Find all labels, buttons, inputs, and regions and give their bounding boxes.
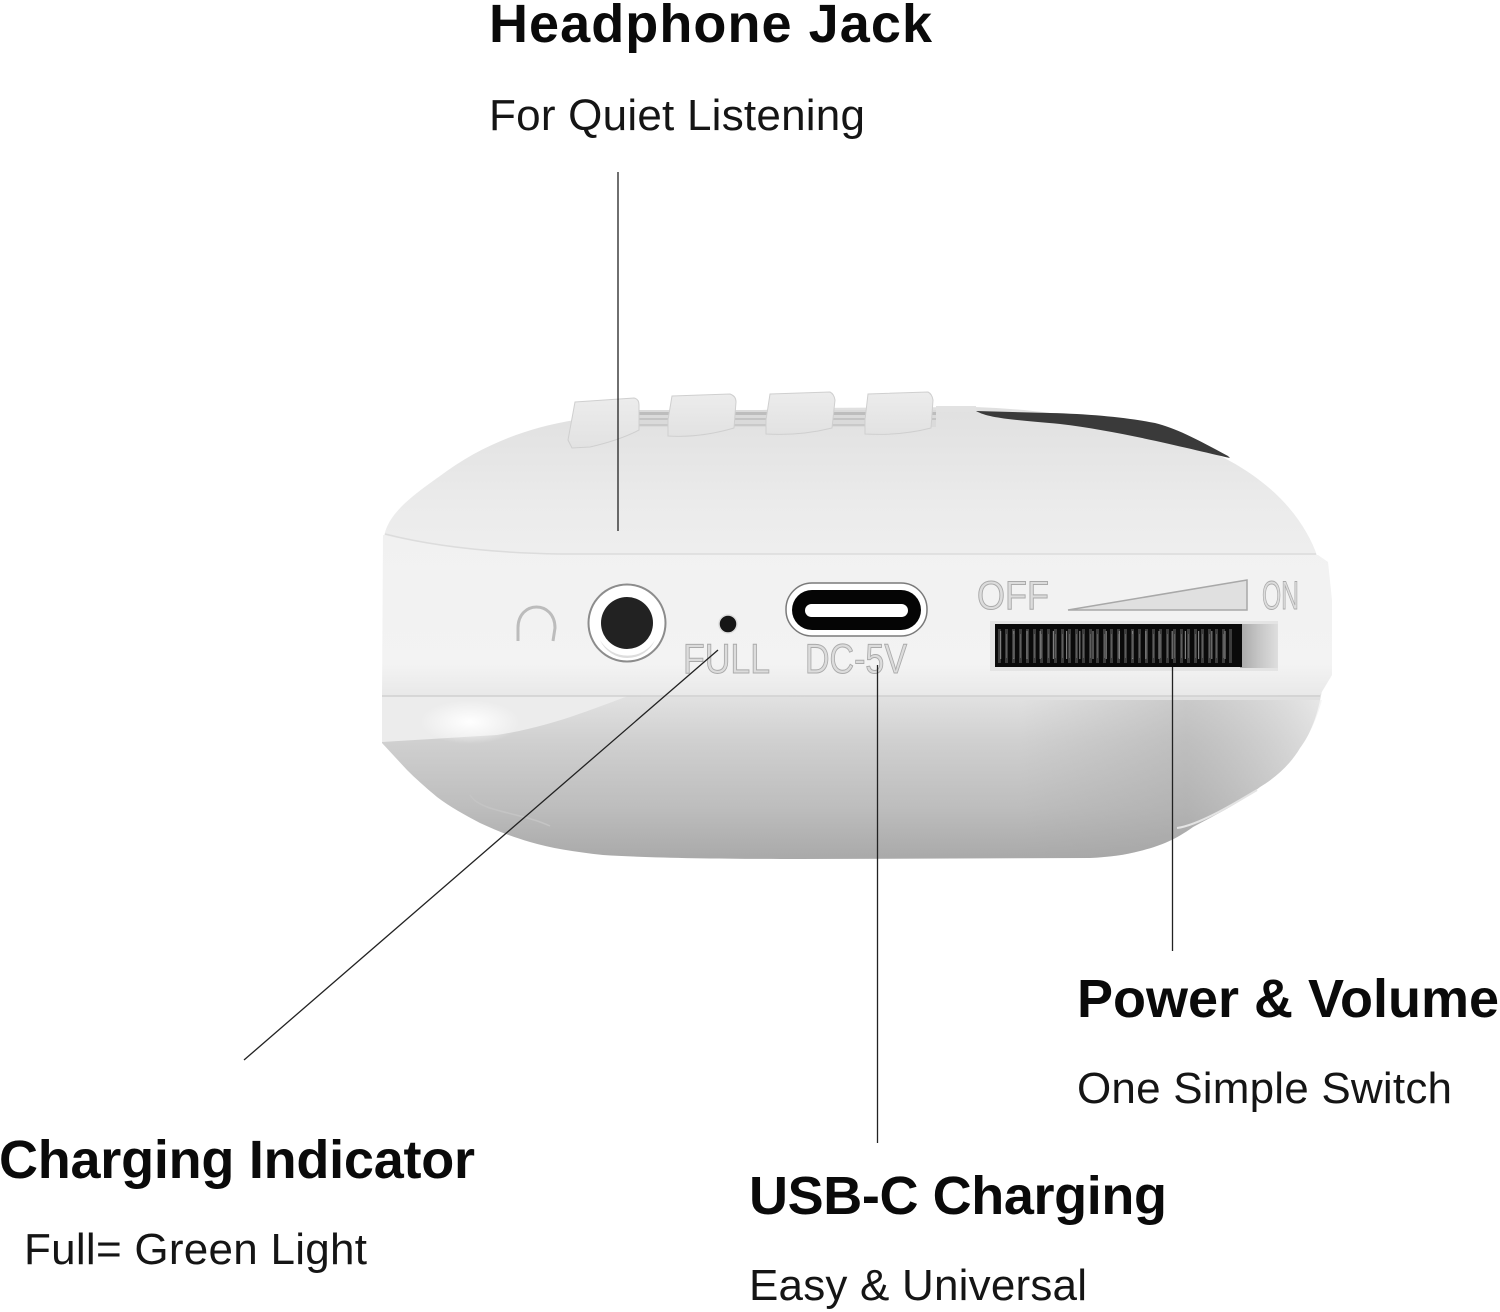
bevel highlight (420, 700, 520, 744)
DC-5V label: DC-5V (805, 635, 907, 682)
side button 2 (668, 394, 736, 436)
charging LED (719, 615, 737, 633)
device upper shell (383, 407, 1318, 600)
callout: power and volume (1077, 969, 1499, 1113)
leader line: power and volume (1172, 667, 1174, 951)
lower seam (382, 695, 1320, 697)
icon: headphone symbol (518, 607, 555, 641)
subtext: Easy & Universal (749, 1261, 1087, 1310)
OFF label: OFF (977, 574, 1049, 618)
lower left seam arc (470, 795, 550, 826)
ON label: ON (1262, 574, 1299, 618)
lower shell light bevel (382, 692, 640, 742)
band seam shadow (385, 534, 1316, 554)
callout: USB-C charging (749, 1166, 1167, 1310)
dark display strip (976, 411, 1230, 458)
heading: Power & Volume (1077, 969, 1499, 1029)
side button 3 (766, 392, 835, 434)
device lower shell (382, 690, 1322, 859)
subtext: Full= Green Light (24, 1225, 367, 1274)
front band (382, 535, 1332, 697)
side button 4 (865, 392, 933, 434)
callout: charging indicator (0, 1130, 475, 1274)
leader line: USB-C charging (876, 665, 878, 1143)
subtext: One Simple Switch (1077, 1064, 1452, 1113)
lower shell right shading (1020, 700, 1322, 858)
FULL label: FULL (683, 635, 770, 682)
leader line: charging indicator (244, 650, 718, 1060)
volume wedge (1068, 580, 1247, 610)
device illustration (382, 392, 1332, 859)
callout: headphone jack (489, 0, 933, 140)
side button 1 (568, 398, 639, 448)
leader line: headphone jack (617, 172, 619, 531)
USB-C port (786, 583, 927, 636)
thumbwheel slot (990, 621, 1278, 671)
heading: USB-C Charging (749, 1166, 1167, 1226)
heading: Charging Indicator (0, 1130, 475, 1190)
lower right seam arc (1177, 790, 1257, 828)
headphone jack socket (588, 584, 666, 662)
subtext: For Quiet Listening (489, 91, 865, 140)
rib strip between buttons (636, 406, 976, 427)
